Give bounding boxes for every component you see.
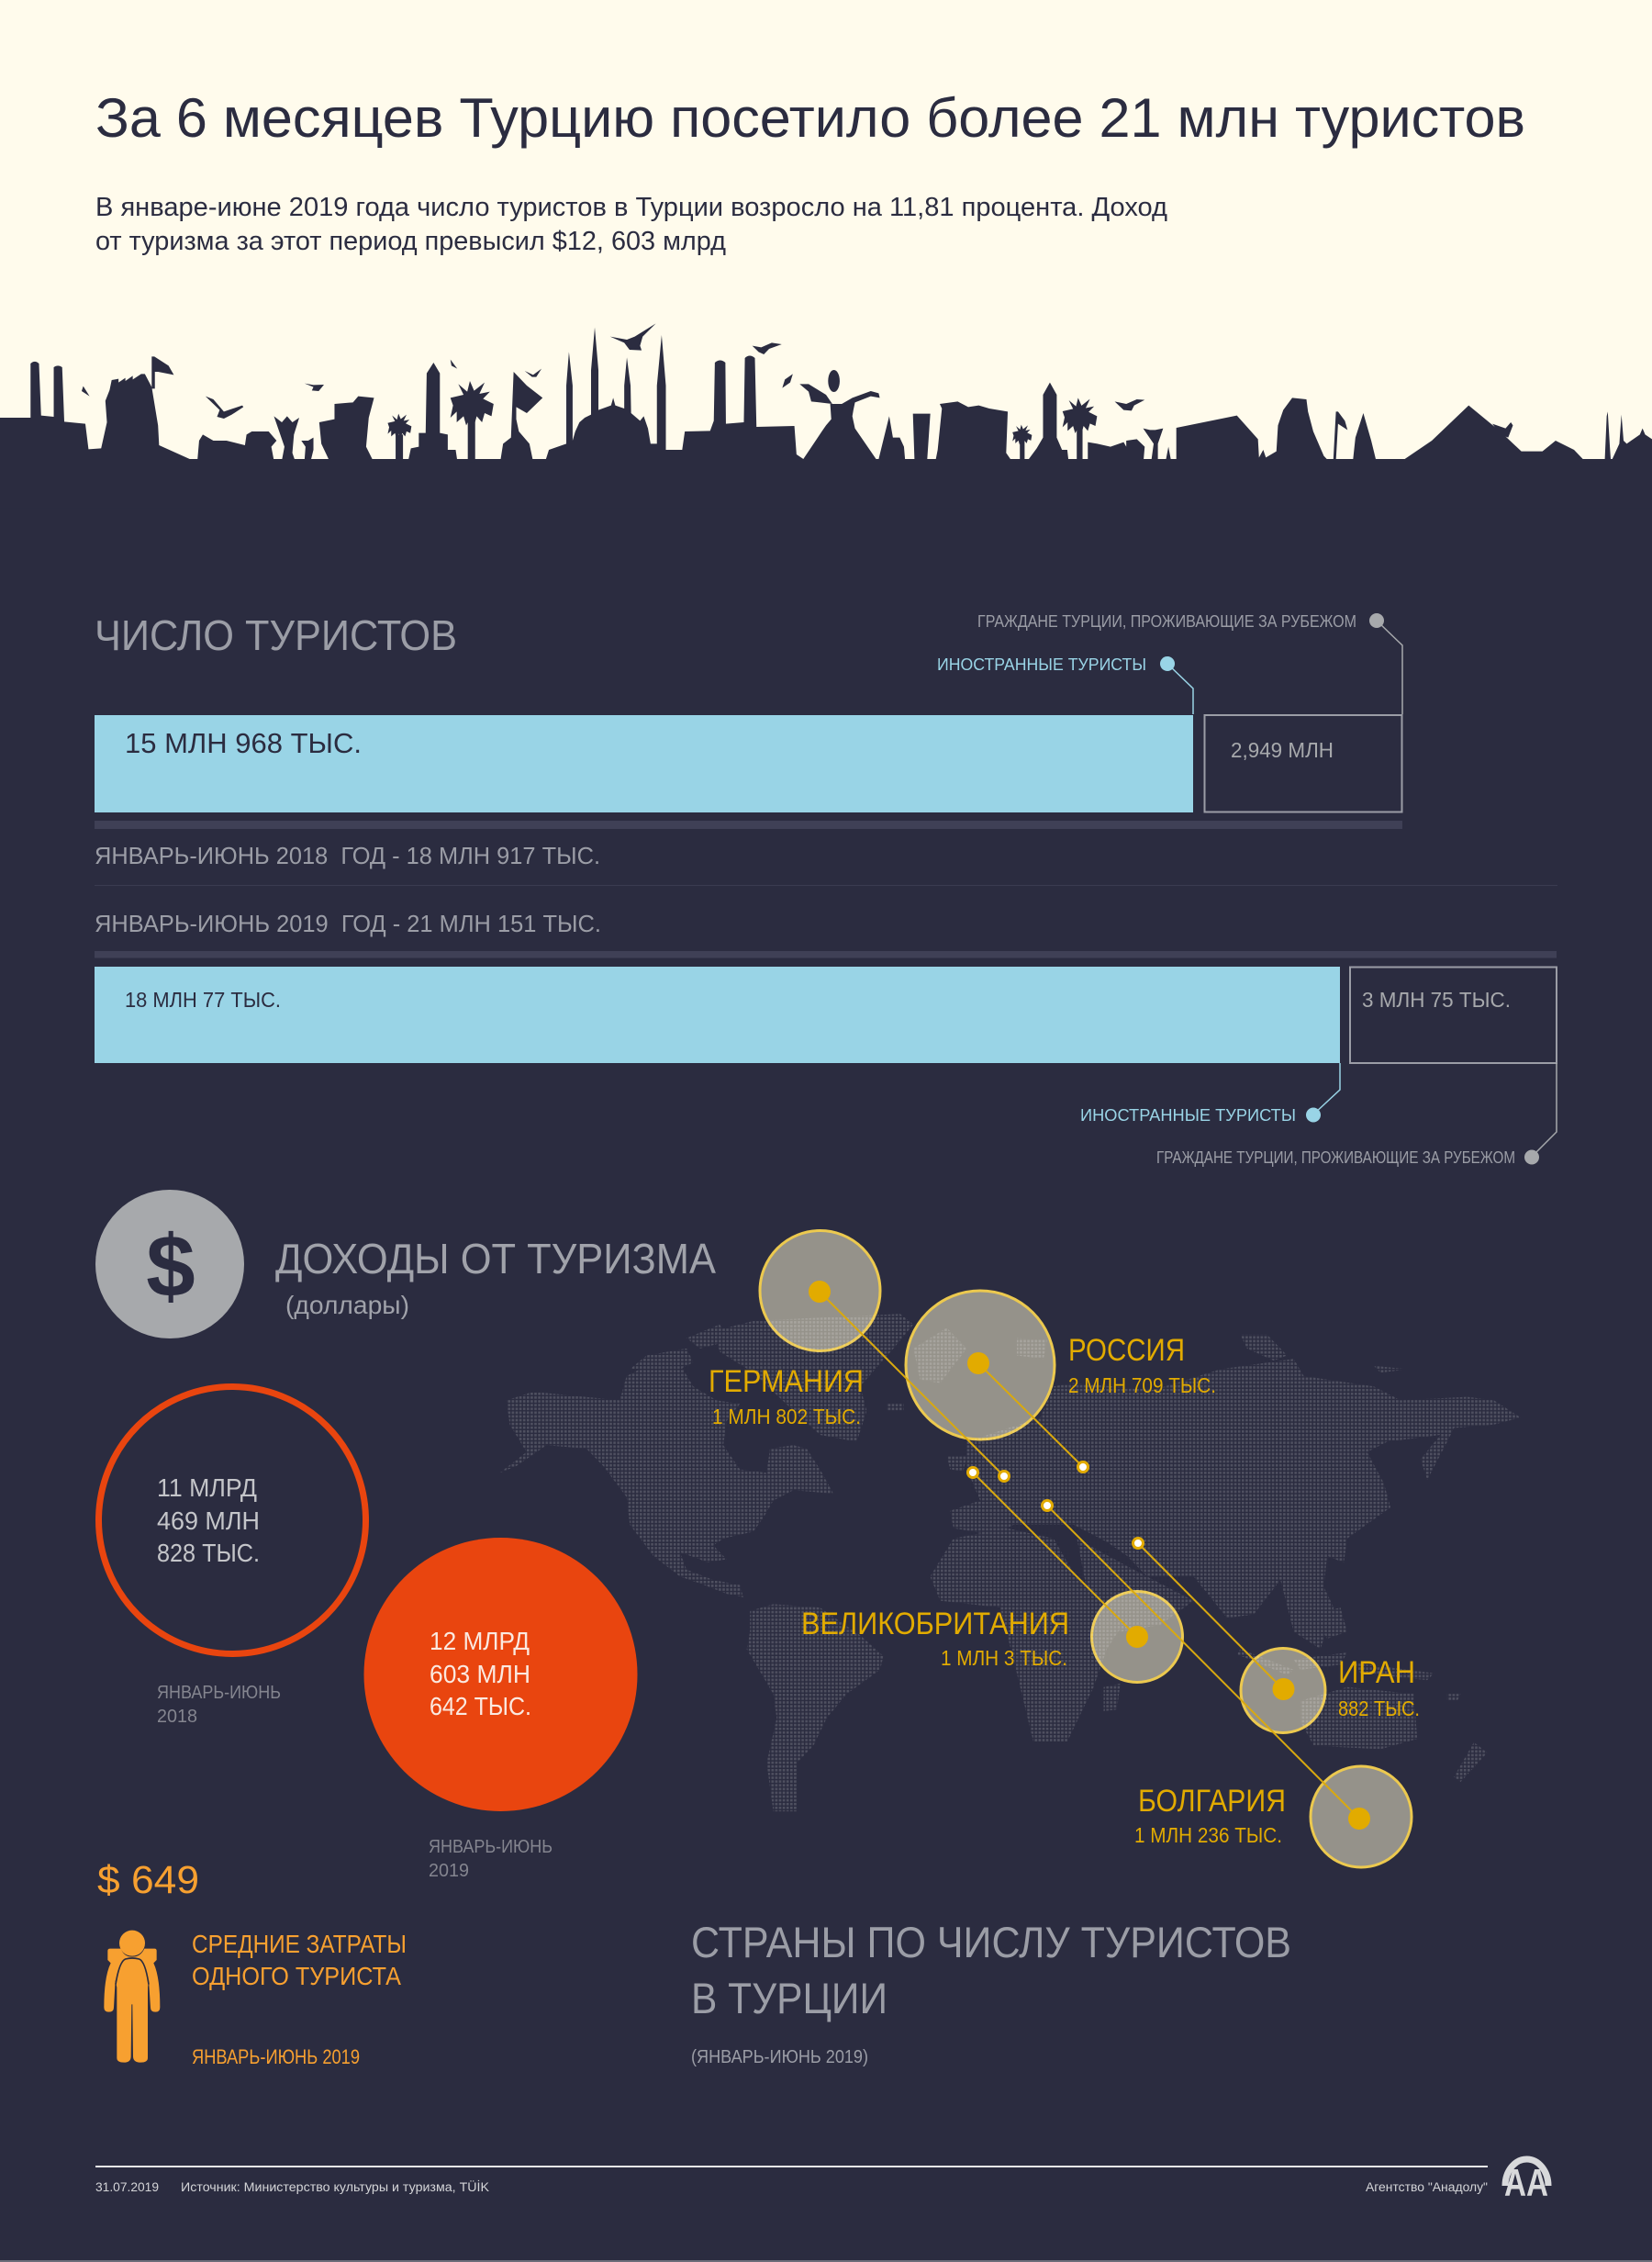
callout: foreign tourists 2019 <box>1080 1063 1340 1125</box>
revenue circle 2018: 469 МЛН <box>157 1506 260 1535</box>
label: Iran <box>1338 1655 1420 1720</box>
average spend per tourist: СРЕДНИЕ ЗАТРАТЫ <box>192 1930 407 1958</box>
icon: backpacker <box>104 1931 160 2063</box>
label: Iran: 882 ТЫС. <box>1338 1696 1420 1720</box>
callout: foreign tourists 2018 <box>937 655 1193 714</box>
bar 2019: foreign tourists <box>95 967 1340 1063</box>
flag on tower <box>151 356 173 388</box>
period label 2019: ЯНВАРЬ-ИЮНЬ <box>429 1837 553 1857</box>
bar 2019: foreign tourists: 18 МЛН 77 ТЫС. <box>125 988 281 1012</box>
total bar 2019 <box>95 951 1557 958</box>
revenue circle 2018 <box>99 1386 365 1654</box>
period label 2018: ЯНВАРЬ-ИЮНЬ <box>157 1683 281 1703</box>
heading: tourism revenue: (доллары) <box>285 1291 409 1319</box>
label: Russia <box>1068 1333 1216 1397</box>
callout: citizens abroad 2019 <box>1156 1063 1557 1167</box>
revenue circle 2018: 828 ТЫС. <box>157 1539 260 1567</box>
revenue circle 2019: 642 ТЫС. <box>430 1692 531 1720</box>
bubble map of tourist countries <box>486 1230 1533 1867</box>
callout: foreign tourists 2018: ИНОСТРАННЫЕ ТУРИСТЫ <box>937 655 1146 674</box>
revenue circle 2019: 603 МЛН <box>430 1660 530 1688</box>
average spend per tourist: $ 649 <box>97 1858 199 1902</box>
icon: dollar coin: $ <box>146 1217 195 1316</box>
label: Germany: ГЕРМАНИЯ <box>709 1364 864 1399</box>
subtitle text block: от туризма за этот период превысил $12, 603 млрд <box>95 227 726 256</box>
revenue circle 2019: 12 МЛРД <box>430 1627 530 1655</box>
period label 2018 <box>157 1683 281 1727</box>
label: Iran: ИРАН <box>1338 1655 1415 1690</box>
revenue circle 2018: 11 МЛРД <box>157 1473 257 1502</box>
label: Russia: 2 МЛН 709 ТЫС. <box>1068 1373 1216 1397</box>
heading: countries by tourists: В ТУРЦИИ <box>691 1974 887 2022</box>
footer source text: Источник: Министерство культуры и туризма, TÜİK <box>181 2180 489 2194</box>
bar 2018: foreign tourists: 15 МЛН 968 ТЫС. <box>125 727 362 759</box>
bubble centres <box>809 1281 1370 1830</box>
subtitle text block: В январе-июне 2019 года число туристов в Турции возросло на 11,81 процента. Доход <box>95 193 1167 222</box>
callout: citizens abroad 2018: ГРАЖДАНЕ ТУРЦИИ, ПРОЖИВАЮЩИЕ ЗА РУБЕЖОМ <box>977 612 1356 631</box>
average spend per tourist <box>97 1858 407 2068</box>
bar 2018: citizens abroad: 2,949 МЛН <box>1231 738 1334 762</box>
label: Bulgaria <box>1134 1784 1286 1847</box>
average spend per tourist: ЯНВАРЬ-ИЮНЬ 2019 <box>192 2045 360 2068</box>
leader lines <box>820 1292 1359 1819</box>
average spend per tourist: ОДНОГО ТУРИСТА <box>192 1962 401 1990</box>
footer source text: 31.07.2019 <box>95 2180 159 2194</box>
climber on pyramid <box>1492 422 1512 438</box>
total label 2018: ЯНВАРЬ-ИЮНЬ 2018 ГОД - 18 МЛН 917 ТЫС. <box>95 842 600 869</box>
callout: foreign tourists 2019: ИНОСТРАННЫЕ ТУРИСТЫ <box>1080 1106 1296 1125</box>
label: Russia: РОССИЯ <box>1068 1333 1185 1368</box>
palm trees <box>387 381 1097 462</box>
period label 2018: 2018 <box>157 1707 197 1727</box>
label: Bulgaria: БОЛГАРИЯ <box>1138 1784 1286 1819</box>
callout: citizens abroad 2018 <box>977 612 1402 714</box>
label: United Kingdom <box>801 1607 1069 1670</box>
heading: countries by tourists: (ЯНВАРЬ-ИЮНЬ 2019) <box>691 2047 868 2067</box>
flag on pole <box>1334 411 1347 461</box>
bar 2018: citizens abroad <box>1204 715 1402 812</box>
label: Germany <box>709 1364 864 1428</box>
heading: tourism revenue <box>275 1235 716 1319</box>
heading: countries by tourists <box>691 1918 1291 2067</box>
callout: citizens abroad 2019: ГРАЖДАНЕ ТУРЦИИ, ПРОЖИВАЮЩИЕ ЗА РУБЕЖОМ <box>1156 1148 1515 1167</box>
total label 2019: ЯНВАРЬ-ИЮНЬ 2019 ГОД - 21 МЛН 151 ТЫС. <box>95 910 601 937</box>
subtitle text block <box>95 193 1167 256</box>
dotted world map <box>501 1314 1519 1812</box>
bubbles <box>760 1230 1412 1867</box>
heading: countries by tourists: СТРАНЫ ПО ЧИСЛУ ТУРИСТОВ <box>691 1918 1291 1966</box>
footer source text <box>95 2180 1488 2194</box>
revenue circle 2019 <box>363 1538 637 1811</box>
icon: Anadolu Agency logo: AA <box>1504 2161 1548 2204</box>
heading: number of tourists: ЧИСЛО ТУРИСТОВ <box>95 611 457 659</box>
label: United Kingdom: ВЕЛИКОБРИТАНИЯ <box>801 1607 1069 1641</box>
footer source text: Агентство "Анадолу" <box>1366 2180 1488 2194</box>
period label 2019: 2019 <box>429 1861 469 1881</box>
period label 2019 <box>429 1837 553 1881</box>
whirling dervish <box>799 370 840 404</box>
location pins <box>967 1461 1144 1548</box>
bar 2019: citizens abroad: 3 МЛН 75 ТЫС. <box>1362 988 1511 1012</box>
title: За 6 месяцев Турцию посетило более 21 млн туристов <box>95 87 1525 149</box>
icon: dollar coin <box>95 1190 244 1338</box>
total bar 2018 <box>95 821 1402 829</box>
label: Germany: 1 МЛН 802 ТЫС. <box>712 1405 861 1428</box>
birds <box>82 323 1144 419</box>
label: Bulgaria: 1 МЛН 236 ТЫС. <box>1134 1823 1282 1847</box>
bar 2019: citizens abroad <box>1350 968 1557 1063</box>
bar 2018: foreign tourists <box>95 715 1193 812</box>
skyline silhouette of Turkish landmarks <box>0 323 1652 508</box>
label: United Kingdom: 1 МЛН 3 ТЫС. <box>941 1646 1067 1670</box>
heading: tourism revenue: ДОХОДЫ ОТ ТУРИЗМА <box>275 1235 716 1282</box>
